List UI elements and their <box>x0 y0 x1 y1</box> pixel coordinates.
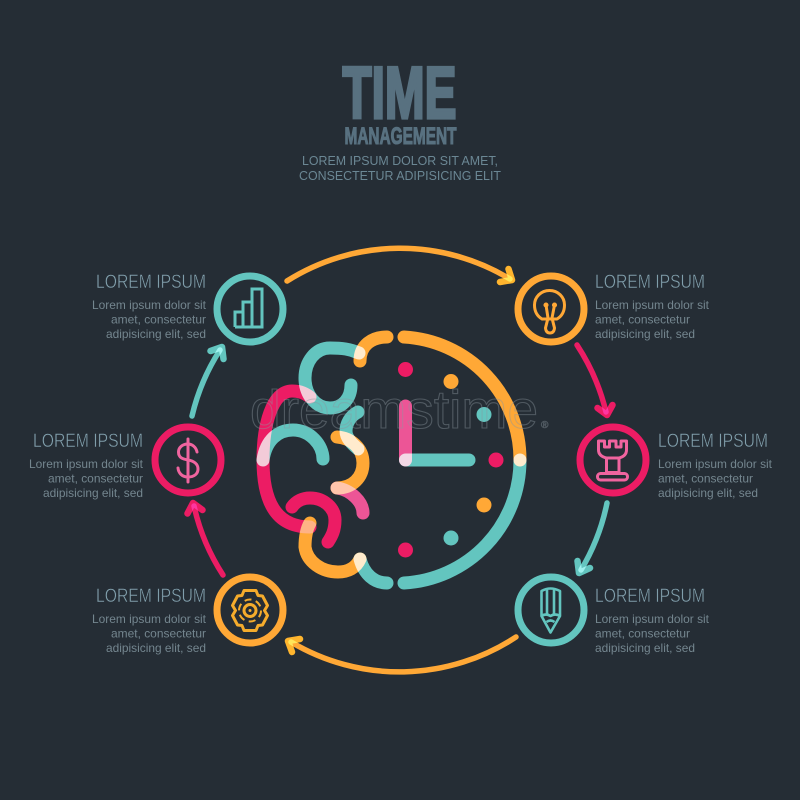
text block: bottom left <box>92 585 207 655</box>
text block: top left: LOREM IPSUM <box>96 271 206 293</box>
clock and brain <box>263 337 520 583</box>
brain: lower pink lobe <box>292 498 335 542</box>
text block: middle left: LOREM IPSUM <box>33 430 143 452</box>
text block: bottom left: LOREM IPSUM <box>96 585 206 607</box>
clock rim: teal arc <box>404 460 520 583</box>
text block: top right: adipisicing elit, sed <box>595 327 695 341</box>
title: MANAGEMENT <box>344 123 457 150</box>
brain: middle teal lobe <box>263 430 323 460</box>
text block: bottom left: adipisicing elit, sed <box>106 641 206 655</box>
brain: top orange lobe <box>360 337 387 361</box>
text block: top right: Lorem ipsum dolor sit <box>595 298 710 312</box>
subtitle <box>299 153 501 183</box>
text block: middle left: Lorem ipsum dolor sit <box>29 457 144 471</box>
brain: lower orange lobe <box>305 523 360 572</box>
text block: bottom right <box>595 585 710 655</box>
text block: middle right: amet, consectetur <box>658 472 753 486</box>
clock minute hand <box>406 454 469 466</box>
text block: middle left: amet, consectetur <box>48 472 143 486</box>
text block: middle left: adipisicing elit, sed <box>43 486 143 500</box>
text block: bottom right: LOREM IPSUM <box>595 585 705 607</box>
subtitle: CONSECTETUR ADIPISICING ELIT <box>299 168 501 183</box>
text block: middle right: adipisicing elit, sed <box>658 486 758 500</box>
brain: lower teal lobe <box>360 559 387 583</box>
icon: gear in orange circle <box>217 577 283 643</box>
clock hour hand <box>399 406 412 460</box>
arrow: bottom orange <box>288 637 516 672</box>
text block: middle right <box>658 430 773 500</box>
watermark: dreamstime <box>250 380 538 440</box>
text block: bottom left: Lorem ipsum dolor sit <box>92 612 207 626</box>
arrow: right teal <box>578 503 607 573</box>
arrow: left pink <box>188 503 223 575</box>
icon: pencil in teal circle <box>518 577 584 643</box>
text block: top left: adipisicing elit, sed <box>106 327 206 341</box>
arrow: right pink <box>577 345 612 415</box>
text block: middle right: Lorem ipsum dolor sit <box>658 457 773 471</box>
clock rim: orange arc <box>404 337 520 460</box>
icon: bar chart in teal circle <box>217 276 283 342</box>
brain: light pink lobe <box>337 488 363 513</box>
text block: bottom right: adipisicing elit, sed <box>595 641 695 655</box>
subtitle: LOREM IPSUM DOLOR SIT AMET, <box>302 153 498 168</box>
text block: top left <box>92 271 207 341</box>
icon: dollar in pink circle <box>155 427 221 493</box>
title <box>342 53 457 150</box>
brain: small teal lobe <box>346 412 358 449</box>
watermark: ® <box>541 420 549 431</box>
text block: top right: LOREM IPSUM <box>595 271 705 293</box>
text block: top right: amet, consectetur <box>595 312 690 326</box>
text block: top left: amet, consectetur <box>111 312 206 326</box>
brain: middle orange lobe <box>337 437 363 488</box>
text block: top right <box>595 271 710 341</box>
brain: top teal lobe <box>305 348 359 408</box>
brain: left pink lobe <box>263 391 310 527</box>
arrow: top orange <box>287 248 512 282</box>
text block: middle left <box>29 430 144 500</box>
text block: bottom right: Lorem ipsum dolor sit <box>595 612 710 626</box>
icon: light bulb in orange circle <box>518 276 584 342</box>
text block: bottom left: amet, consectetur <box>111 626 206 640</box>
arrow: left teal <box>192 347 224 416</box>
title: TIME <box>342 53 456 134</box>
icon: rook in pink circle <box>580 427 646 493</box>
text block: top left: Lorem ipsum dolor sit <box>92 298 207 312</box>
text block: middle right: LOREM IPSUM <box>658 430 768 452</box>
text block: bottom right: amet, consectetur <box>595 626 690 640</box>
clock dots <box>398 362 504 558</box>
